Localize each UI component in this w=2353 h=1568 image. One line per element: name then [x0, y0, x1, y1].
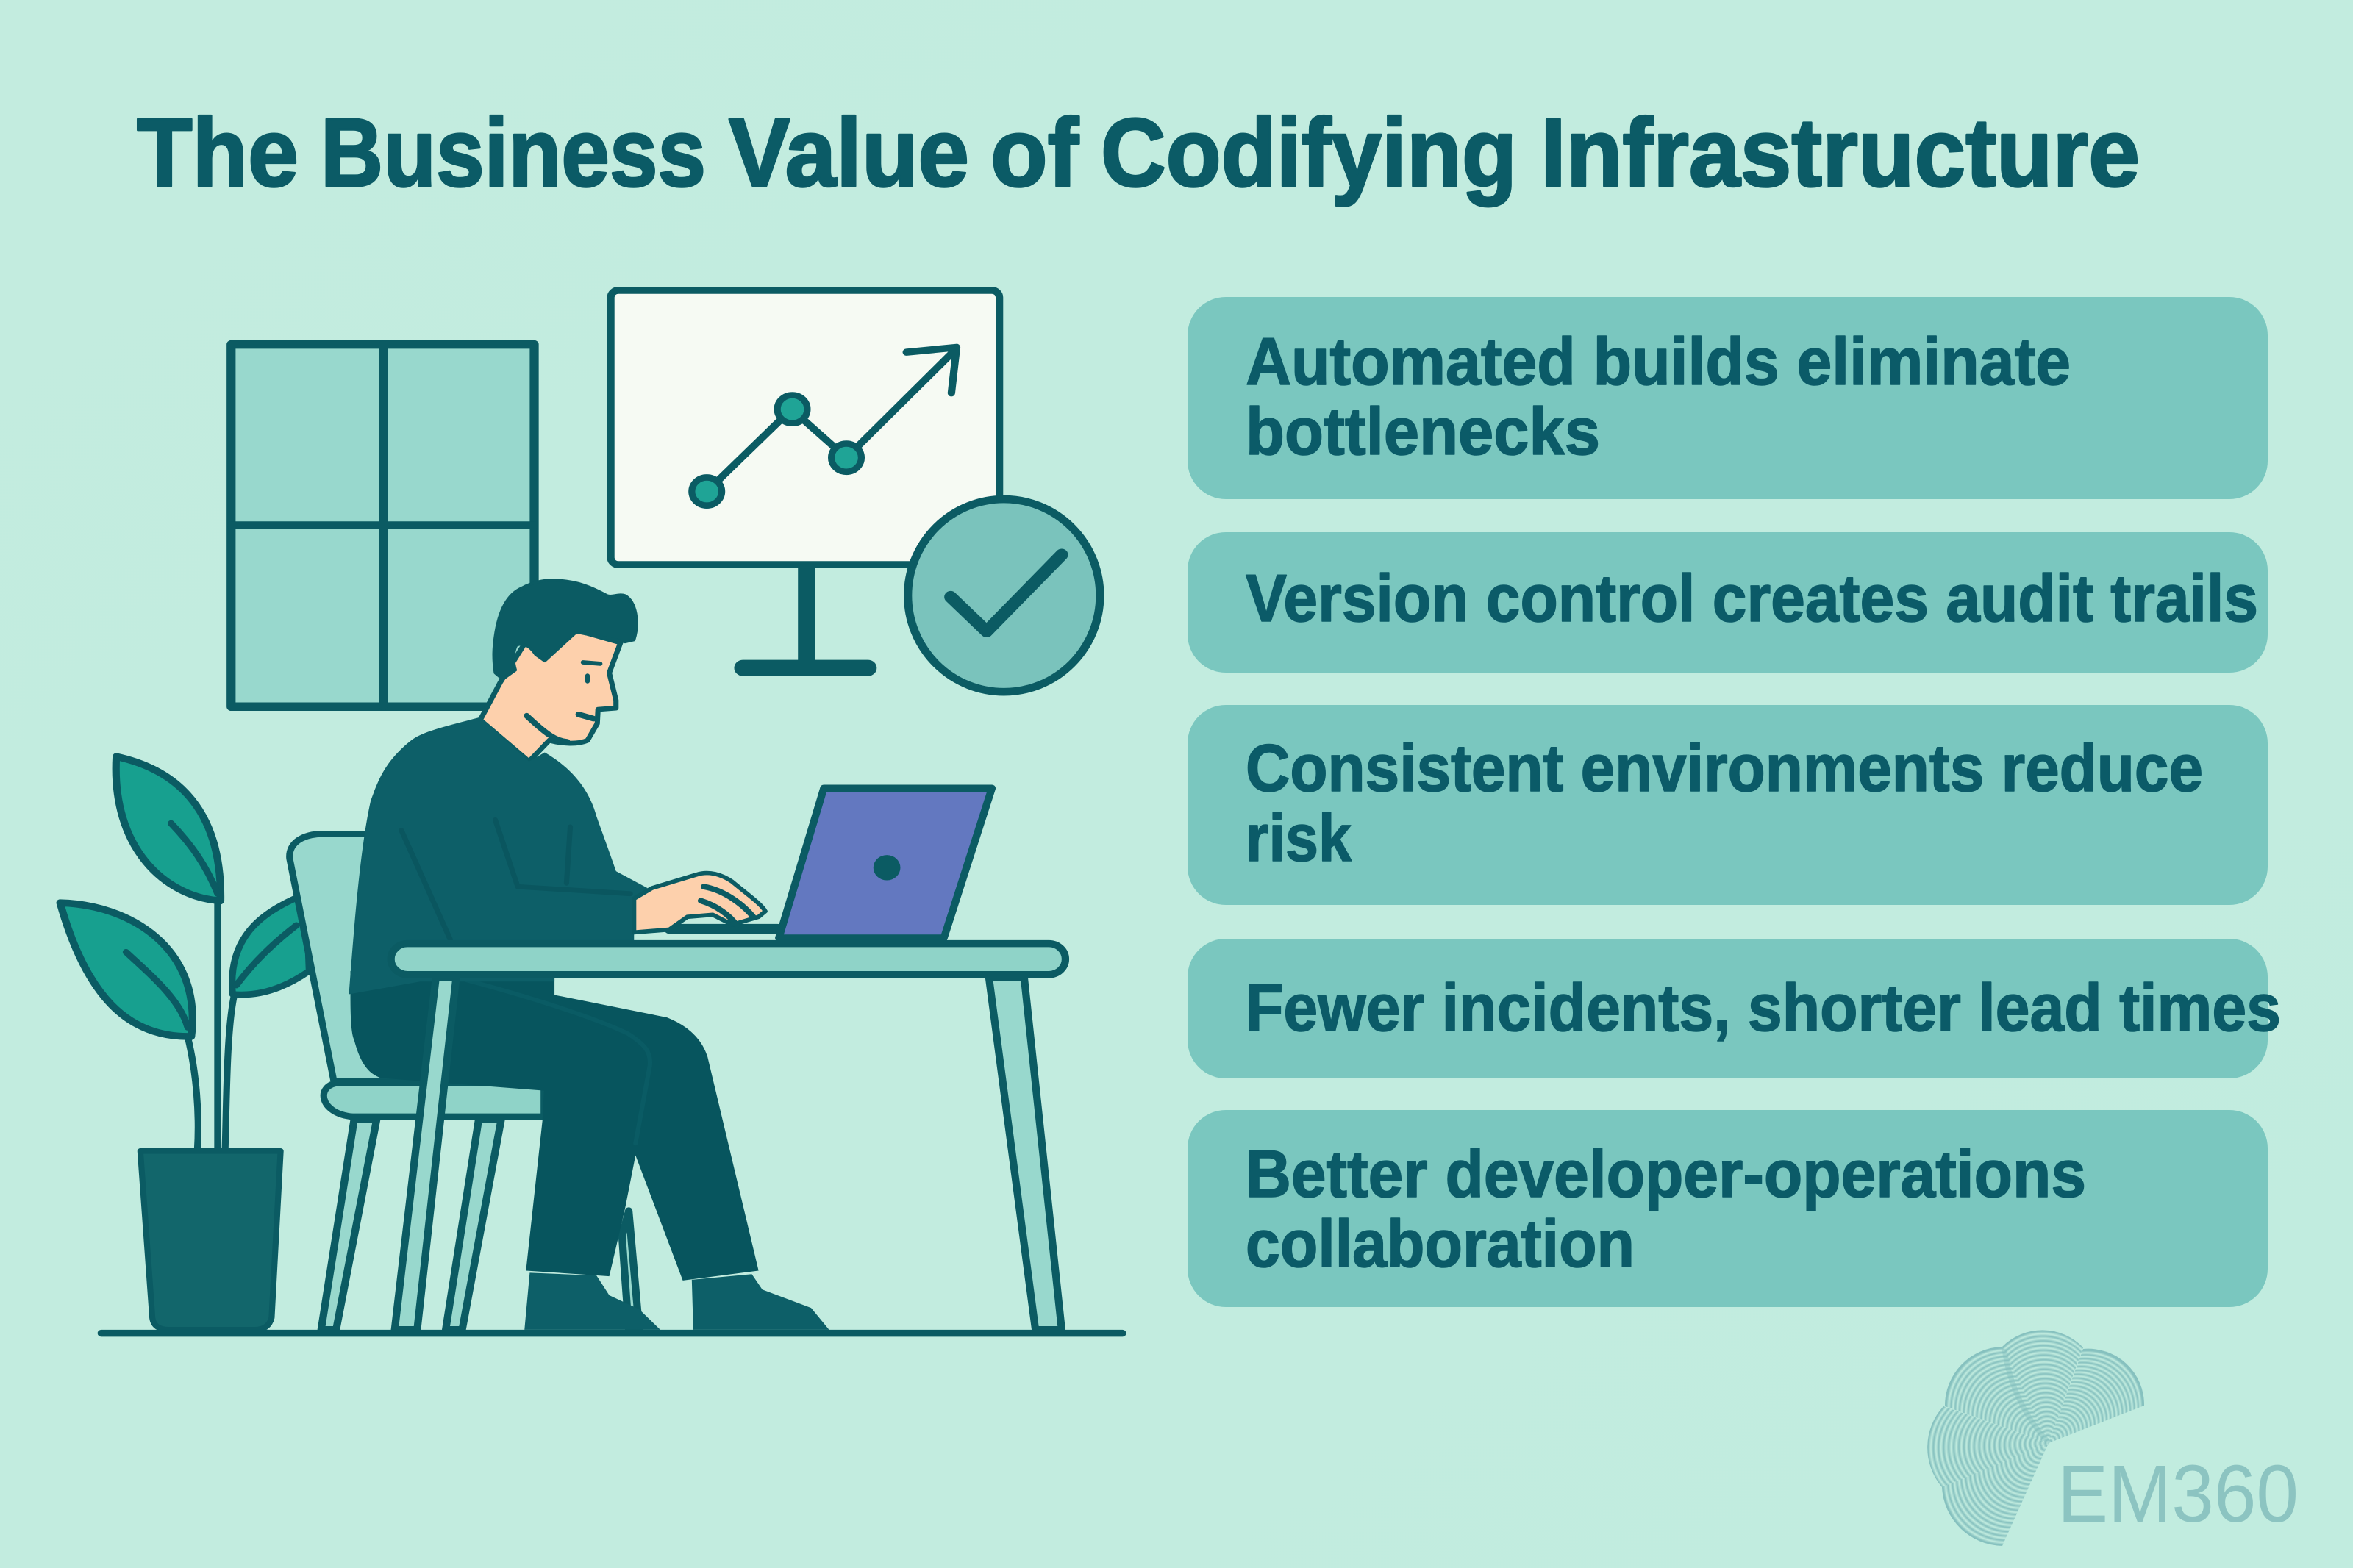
desk top: [391, 944, 1065, 975]
trousers: [351, 971, 759, 1281]
card: version control: Version control creates audit trails: [1246, 562, 2258, 636]
card: consistent environments: Consistent environments reduce: [1246, 731, 2203, 806]
card: consistent environments: [1188, 705, 2268, 905]
title: Business: [321, 99, 706, 207]
card: developer-operations collaboration: [1188, 1110, 2268, 1307]
keyboard base: [669, 924, 777, 934]
sweater folds: [401, 820, 630, 939]
title: [137, 99, 2140, 207]
title: The: [137, 99, 299, 207]
title: Infrastructure: [1540, 99, 2140, 207]
desk: [391, 944, 1065, 1330]
title: of: [990, 99, 1079, 207]
monitor screen: [611, 290, 999, 565]
logo mark: [1927, 1330, 2144, 1546]
fingers: [701, 887, 753, 926]
card: consistent environments: risk: [1246, 801, 1352, 876]
plant: [60, 756, 309, 1330]
mouth and jaw: [526, 715, 593, 742]
keyboard highlight: [668, 936, 773, 938]
card: developer-operations collaboration: Better developer-operations: [1246, 1137, 2086, 1211]
rising line chart: [692, 347, 957, 506]
trouser fold: [467, 980, 650, 1143]
icon: check badge: [908, 499, 1100, 692]
panel: benefits list: [1188, 297, 2281, 1307]
window: [231, 345, 535, 706]
chair: [290, 834, 639, 1330]
hand: [634, 873, 765, 932]
desk legs: [395, 978, 1062, 1330]
logo: EM360 watermark: [1927, 1330, 2299, 1546]
eye and eyebrow: [583, 662, 600, 681]
leaf right: [232, 894, 309, 995]
card: developer-operations collaboration: collaboration: [1246, 1207, 1635, 1281]
illustration: person working at laptop: [60, 290, 1123, 1333]
person: [349, 580, 829, 1330]
card: automated builds: [1188, 297, 2268, 499]
plant pot: [140, 1151, 281, 1330]
logo wordmark: EM360: [2057, 1449, 2299, 1539]
shoes: [524, 1272, 829, 1330]
chair backrest: [290, 834, 420, 1081]
sweater: [349, 717, 648, 995]
card: fewer incidents: Fewer incidents, shorter lead times: [1246, 971, 2281, 1045]
chair seat: [324, 1083, 544, 1117]
leaf top: [116, 756, 221, 901]
leaf left: [60, 903, 193, 1037]
floor line: [101, 1330, 1123, 1337]
card: version control: [1188, 532, 2268, 673]
monitor stand: [743, 565, 868, 668]
card: automated builds: bottlenecks: [1246, 395, 1600, 469]
monitor with line chart: [611, 290, 999, 668]
leaf veins: [126, 823, 296, 1027]
card: fewer incidents: [1188, 939, 2281, 1078]
hair: [494, 580, 637, 679]
title: Codifying: [1101, 99, 1517, 207]
card: automated builds: Automated builds eliminate: [1246, 325, 2071, 399]
laptop: [779, 788, 992, 938]
neck and face: [480, 630, 621, 762]
chair legs: [321, 1120, 639, 1330]
title: Value: [729, 99, 969, 207]
plant stems: [188, 901, 234, 1150]
